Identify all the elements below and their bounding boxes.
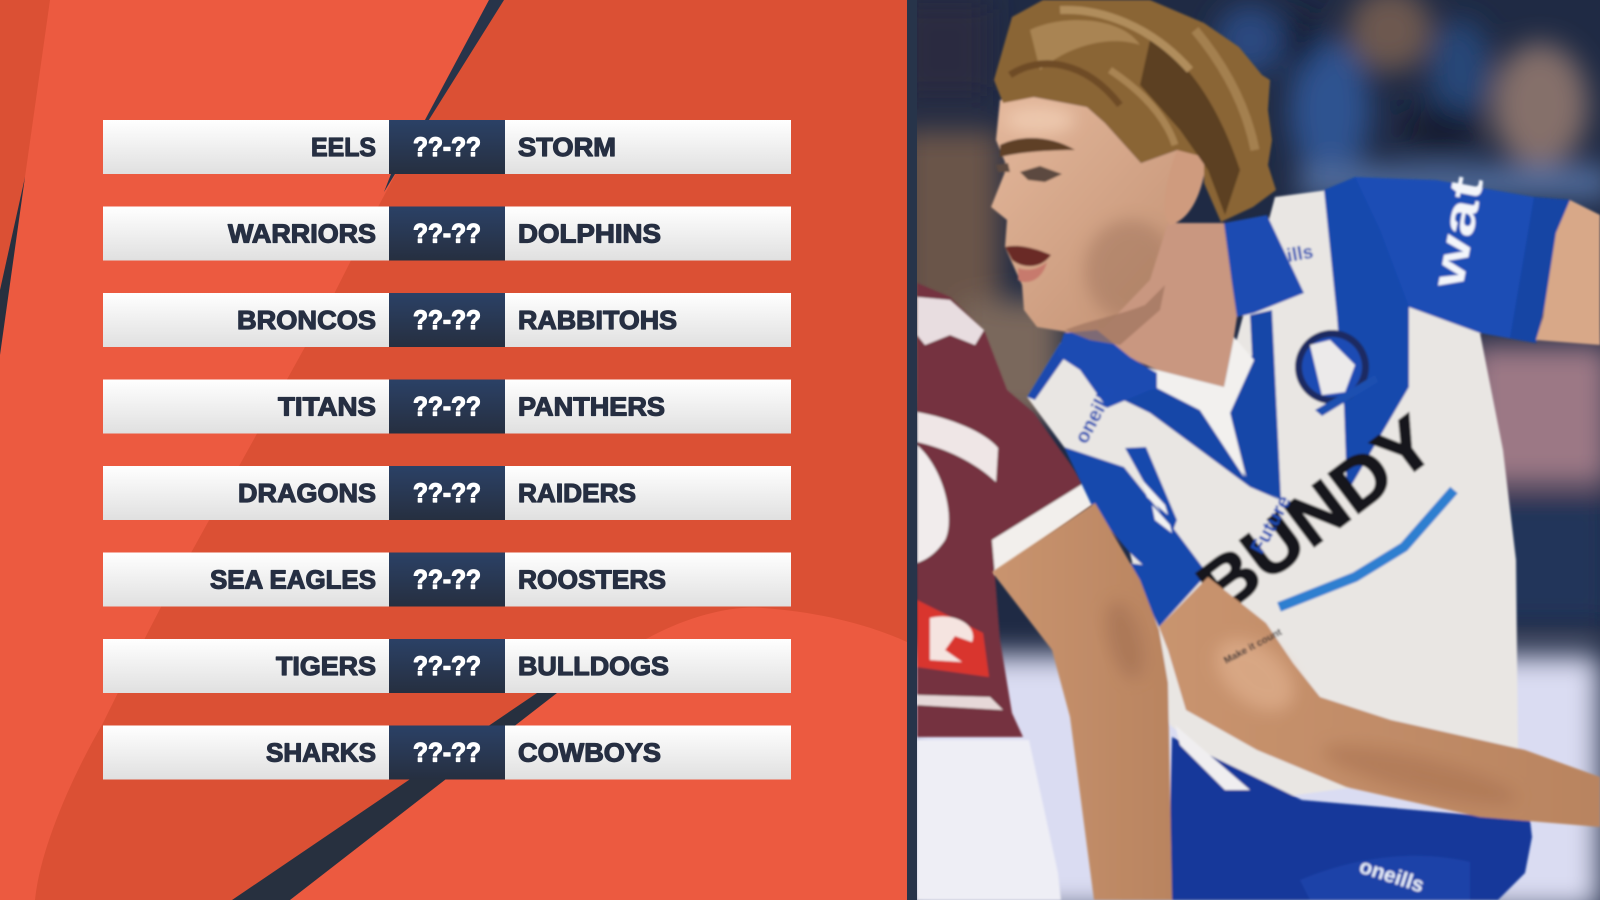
fixture row: Dragons v Raiders: DRAGONS [238,478,376,508]
fixture row: Warriors v Dolphins [103,206,791,260]
fixture row: Broncos v Rabbitohs [103,293,791,347]
fixture row: Tigers v Bulldogs: BULLDOGS [518,651,669,681]
orange background panel [0,0,907,900]
face [990,96,1178,334]
fixture row: Warriors v Dolphins: WARRIORS [228,218,376,248]
foreground arm of opponent [992,503,1172,900]
player photo [900,0,1600,900]
main player: Make it count [1222,627,1284,667]
fixture row: Dragons v Raiders: ??-?? [413,478,481,508]
fixture row: Tigers v Bulldogs: ??-?? [413,651,481,681]
fixture row: Sea Eagles v Roosters: ??-?? [413,564,481,594]
blue collar and placket [1224,215,1304,317]
main player [991,0,1600,900]
fixture row: Eels v Storm [103,120,791,174]
small jersey marks: Future [1247,492,1296,557]
dark divider strip [907,0,917,900]
blue chest band [1324,177,1409,493]
fixture row: Sea Eagles v Roosters: SEA EAGLES [210,564,376,594]
fixture row: Warriors v Dolphins: DOLPHINS [518,218,661,248]
maroon opponent [917,283,1095,900]
fixture row: Dragons v Raiders: RAIDERS [518,478,636,508]
jersey torso [1027,190,1518,800]
fixture row: Warriors v Dolphins: ??-?? [413,218,481,248]
fixture row: Tigers v Bulldogs [103,639,791,693]
club badge [1295,330,1378,416]
fixture row: Eels v Storm: EELS [311,132,376,162]
fixture row: Sharks v Cowboys: ??-?? [413,738,481,768]
fixture row: Eels v Storm: STORM [518,132,616,162]
fixture row: Titans v Panthers [103,380,791,434]
fixture row: Titans v Panthers: ??-?? [413,392,481,422]
fixture row: Broncos v Rabbitohs: RABBITOHS [518,305,677,335]
shorts [1168,737,1532,900]
fixture row: Dragons v Raiders [103,466,791,520]
sleeve [1357,176,1535,340]
shorts logo: oneills [1356,855,1427,897]
fixture row: Sharks v Cowboys [103,726,791,780]
fixture row: Sea Eagles v Roosters [103,552,791,606]
main player: ills [1285,242,1315,267]
fixture row: Sharks v Cowboys: SHARKS [266,738,376,768]
fixture row: Tigers v Bulldogs: TIGERS [276,651,376,681]
fixture row: Broncos v Rabbitohs: ??-?? [413,305,481,335]
neck [1065,223,1237,387]
chest sponsor: BUNDY [1183,401,1449,629]
fixture row: Broncos v Rabbitohs: BRONCOS [237,305,376,335]
fixture row: Titans v Panthers: PANTHERS [518,392,665,422]
fixture row: Eels v Storm: ??-?? [413,132,481,162]
hair [994,0,1276,222]
fixture row: Sharks v Cowboys: COWBOYS [518,738,661,768]
left sleeve [1064,446,1204,574]
sleeve sponsor: wat [1420,172,1493,293]
photo background crowd [900,0,1600,900]
fixture row: Titans v Panthers: TITANS [278,392,376,422]
hitting arm [1159,577,1600,827]
main player: oneills [1071,381,1120,447]
fixture row: Sea Eagles v Roosters: ROOSTERS [518,564,666,594]
